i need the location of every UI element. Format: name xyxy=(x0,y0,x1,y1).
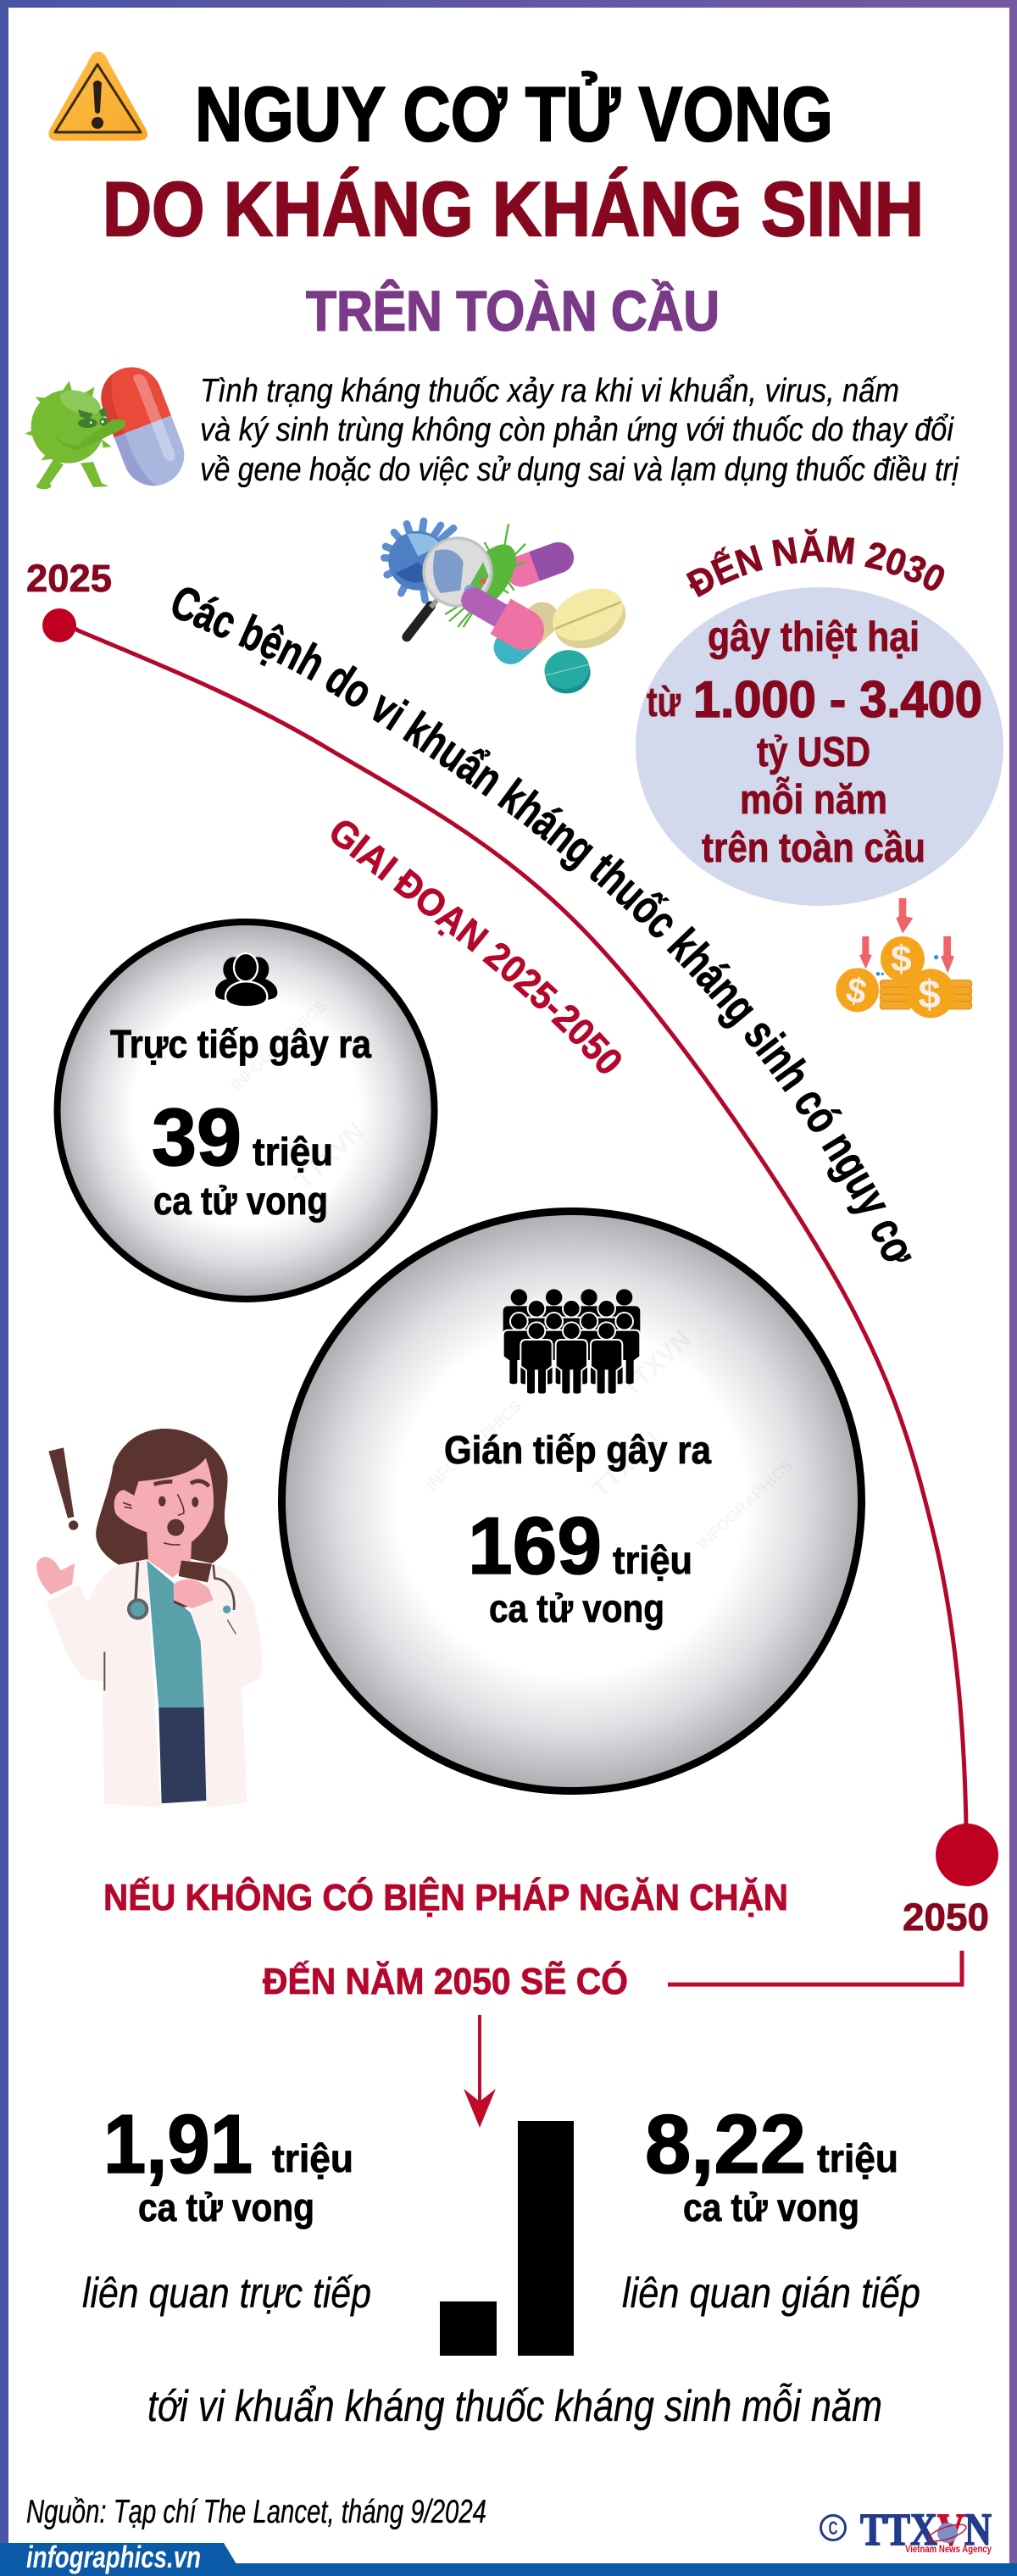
stat: indirect deaths per year xyxy=(622,2097,920,2317)
stat: direct deaths per year: ca tử vong xyxy=(138,2185,314,2229)
panel: indirect deaths circle xyxy=(281,1212,861,1791)
stat: indirect deaths per year: 8,22 xyxy=(645,2097,806,2190)
stat: direct deaths per year: liên quan trực tiếp xyxy=(82,2269,371,2317)
green germ xyxy=(445,524,527,627)
watermarks: TTXVN xyxy=(586,1427,667,1504)
panel: economic damage by 2030 xyxy=(636,587,1003,906)
teal and beige capsule xyxy=(486,595,566,671)
watermarks: TTXVN xyxy=(290,1118,370,1195)
icon: falling coins xyxy=(836,898,972,1018)
icon: warning triangle xyxy=(48,52,147,141)
label: 2050: 2050 xyxy=(903,1896,989,1939)
bar chart xyxy=(440,2121,574,2356)
icon: crowd of people xyxy=(503,1289,640,1395)
teal tablet xyxy=(541,646,595,698)
panel: direct deaths circle: 39 xyxy=(152,1092,242,1183)
illustration: virus, magnifier and pills xyxy=(384,521,634,698)
icon: falling coins: $ xyxy=(842,969,870,1012)
heading: by 2050: ĐẾN NĂM 2050 SẼ CÓ xyxy=(263,1960,628,2002)
source: Nguồn: Tạp chí The Lancet, tháng 9/2024 xyxy=(26,2494,486,2530)
purple capsule xyxy=(501,538,578,591)
panel: direct deaths circle xyxy=(58,922,434,1299)
panel: economic damage by 2030: tỷ USD xyxy=(757,730,870,775)
curved heading: period: GIAI ĐOẠN 2025-2050 xyxy=(331,820,621,1074)
icon: falling coins: $ xyxy=(918,972,941,1017)
panel: indirect deaths circle: 169 xyxy=(468,1501,602,1591)
title line 3: TRÊN TOÀN CẦU xyxy=(306,280,720,343)
closing sentence: tới vi khuẩn kháng thuốc kháng sinh mỗi năm xyxy=(147,2382,882,2431)
icon: falling coins: $ xyxy=(891,939,912,980)
panel: indirect deaths circle: ca tử vong xyxy=(489,1586,664,1630)
icon: three people xyxy=(215,953,277,1007)
stat: direct deaths per year: triệu xyxy=(272,2136,353,2180)
watermarks: TTXVN xyxy=(616,1325,697,1402)
panel: direct deaths circle: Trực tiếp gây ra xyxy=(110,1022,371,1066)
panel: indirect deaths circle: Gián tiếp gây ra xyxy=(444,1428,711,1472)
stat: indirect deaths per year: ca tử vong xyxy=(683,2185,859,2229)
panel: economic damage by 2030: 1.000 - 3.400 xyxy=(693,671,982,728)
pink capsule xyxy=(453,577,552,658)
connector line from 2050 xyxy=(668,1951,962,1985)
curved heading: 2030: ĐẾN NĂM 2030 xyxy=(686,529,944,597)
blue virus xyxy=(384,521,453,600)
logo: TTXVN: TTXVN xyxy=(860,2504,992,2555)
panel: economic damage by 2030: trên toàn cầu xyxy=(702,825,925,871)
logo: TTXVN: C xyxy=(829,2518,838,2539)
stat: indirect deaths per year: triệu xyxy=(817,2136,898,2180)
panel: economic damage by 2030: gây thiệt hại xyxy=(708,614,920,660)
intro paragraph: Tình trạng kháng thuốc xảy ra khi vi khuẩn, virus, nấm xyxy=(200,373,899,409)
curved heading: black: Các bệnh do vi khuẩn kháng thuốc kháng sinh có nguy cơ xyxy=(173,587,912,1263)
panel: direct deaths circle: triệu xyxy=(253,1130,333,1174)
icon: green germ pushing a capsule xyxy=(25,358,193,495)
watermarks: INFOGRAPHICS xyxy=(228,997,331,1095)
logo: TTXVN: Vietnam News Agency xyxy=(905,2545,992,2555)
watermarks: INFOGRAPHICS xyxy=(694,1457,797,1554)
title line 2: DO KHÁNG KHÁNG SINH xyxy=(103,167,924,253)
footer bar xyxy=(0,2540,1017,2576)
timeline curve 2025 to 2050 xyxy=(42,608,998,1886)
heading: without intervention: NẾU KHÔNG CÓ BIỆN PHÁP NGĂN CHẶN xyxy=(103,1875,788,1918)
arrow: down to figures xyxy=(464,2015,496,2128)
watermarks: INFOGRAPHICS xyxy=(423,1397,525,1495)
intro paragraph xyxy=(200,373,959,488)
stat: indirect deaths per year: liên quan gián tiếp xyxy=(622,2269,920,2317)
panel: economic damage by 2030: từ xyxy=(647,680,681,725)
panel: direct deaths circle: ca tử vong xyxy=(153,1179,328,1223)
yellow tablet xyxy=(545,579,634,658)
panel: economic damage by 2030: mỗi năm xyxy=(740,777,887,823)
stat: direct deaths per year: 1,91 xyxy=(103,2097,253,2190)
watermarks xyxy=(228,997,797,1554)
panel: indirect deaths circle: triệu xyxy=(613,1538,692,1582)
illustration: surprised doctor xyxy=(36,1429,262,1808)
footer bar: infographics.vn xyxy=(26,2540,201,2574)
magnifier xyxy=(407,606,431,637)
stat: direct deaths per year xyxy=(82,2097,371,2317)
title line 1: NGUY CƠ TỬ VONG xyxy=(195,71,833,158)
label: 2025: 2025 xyxy=(26,557,112,600)
